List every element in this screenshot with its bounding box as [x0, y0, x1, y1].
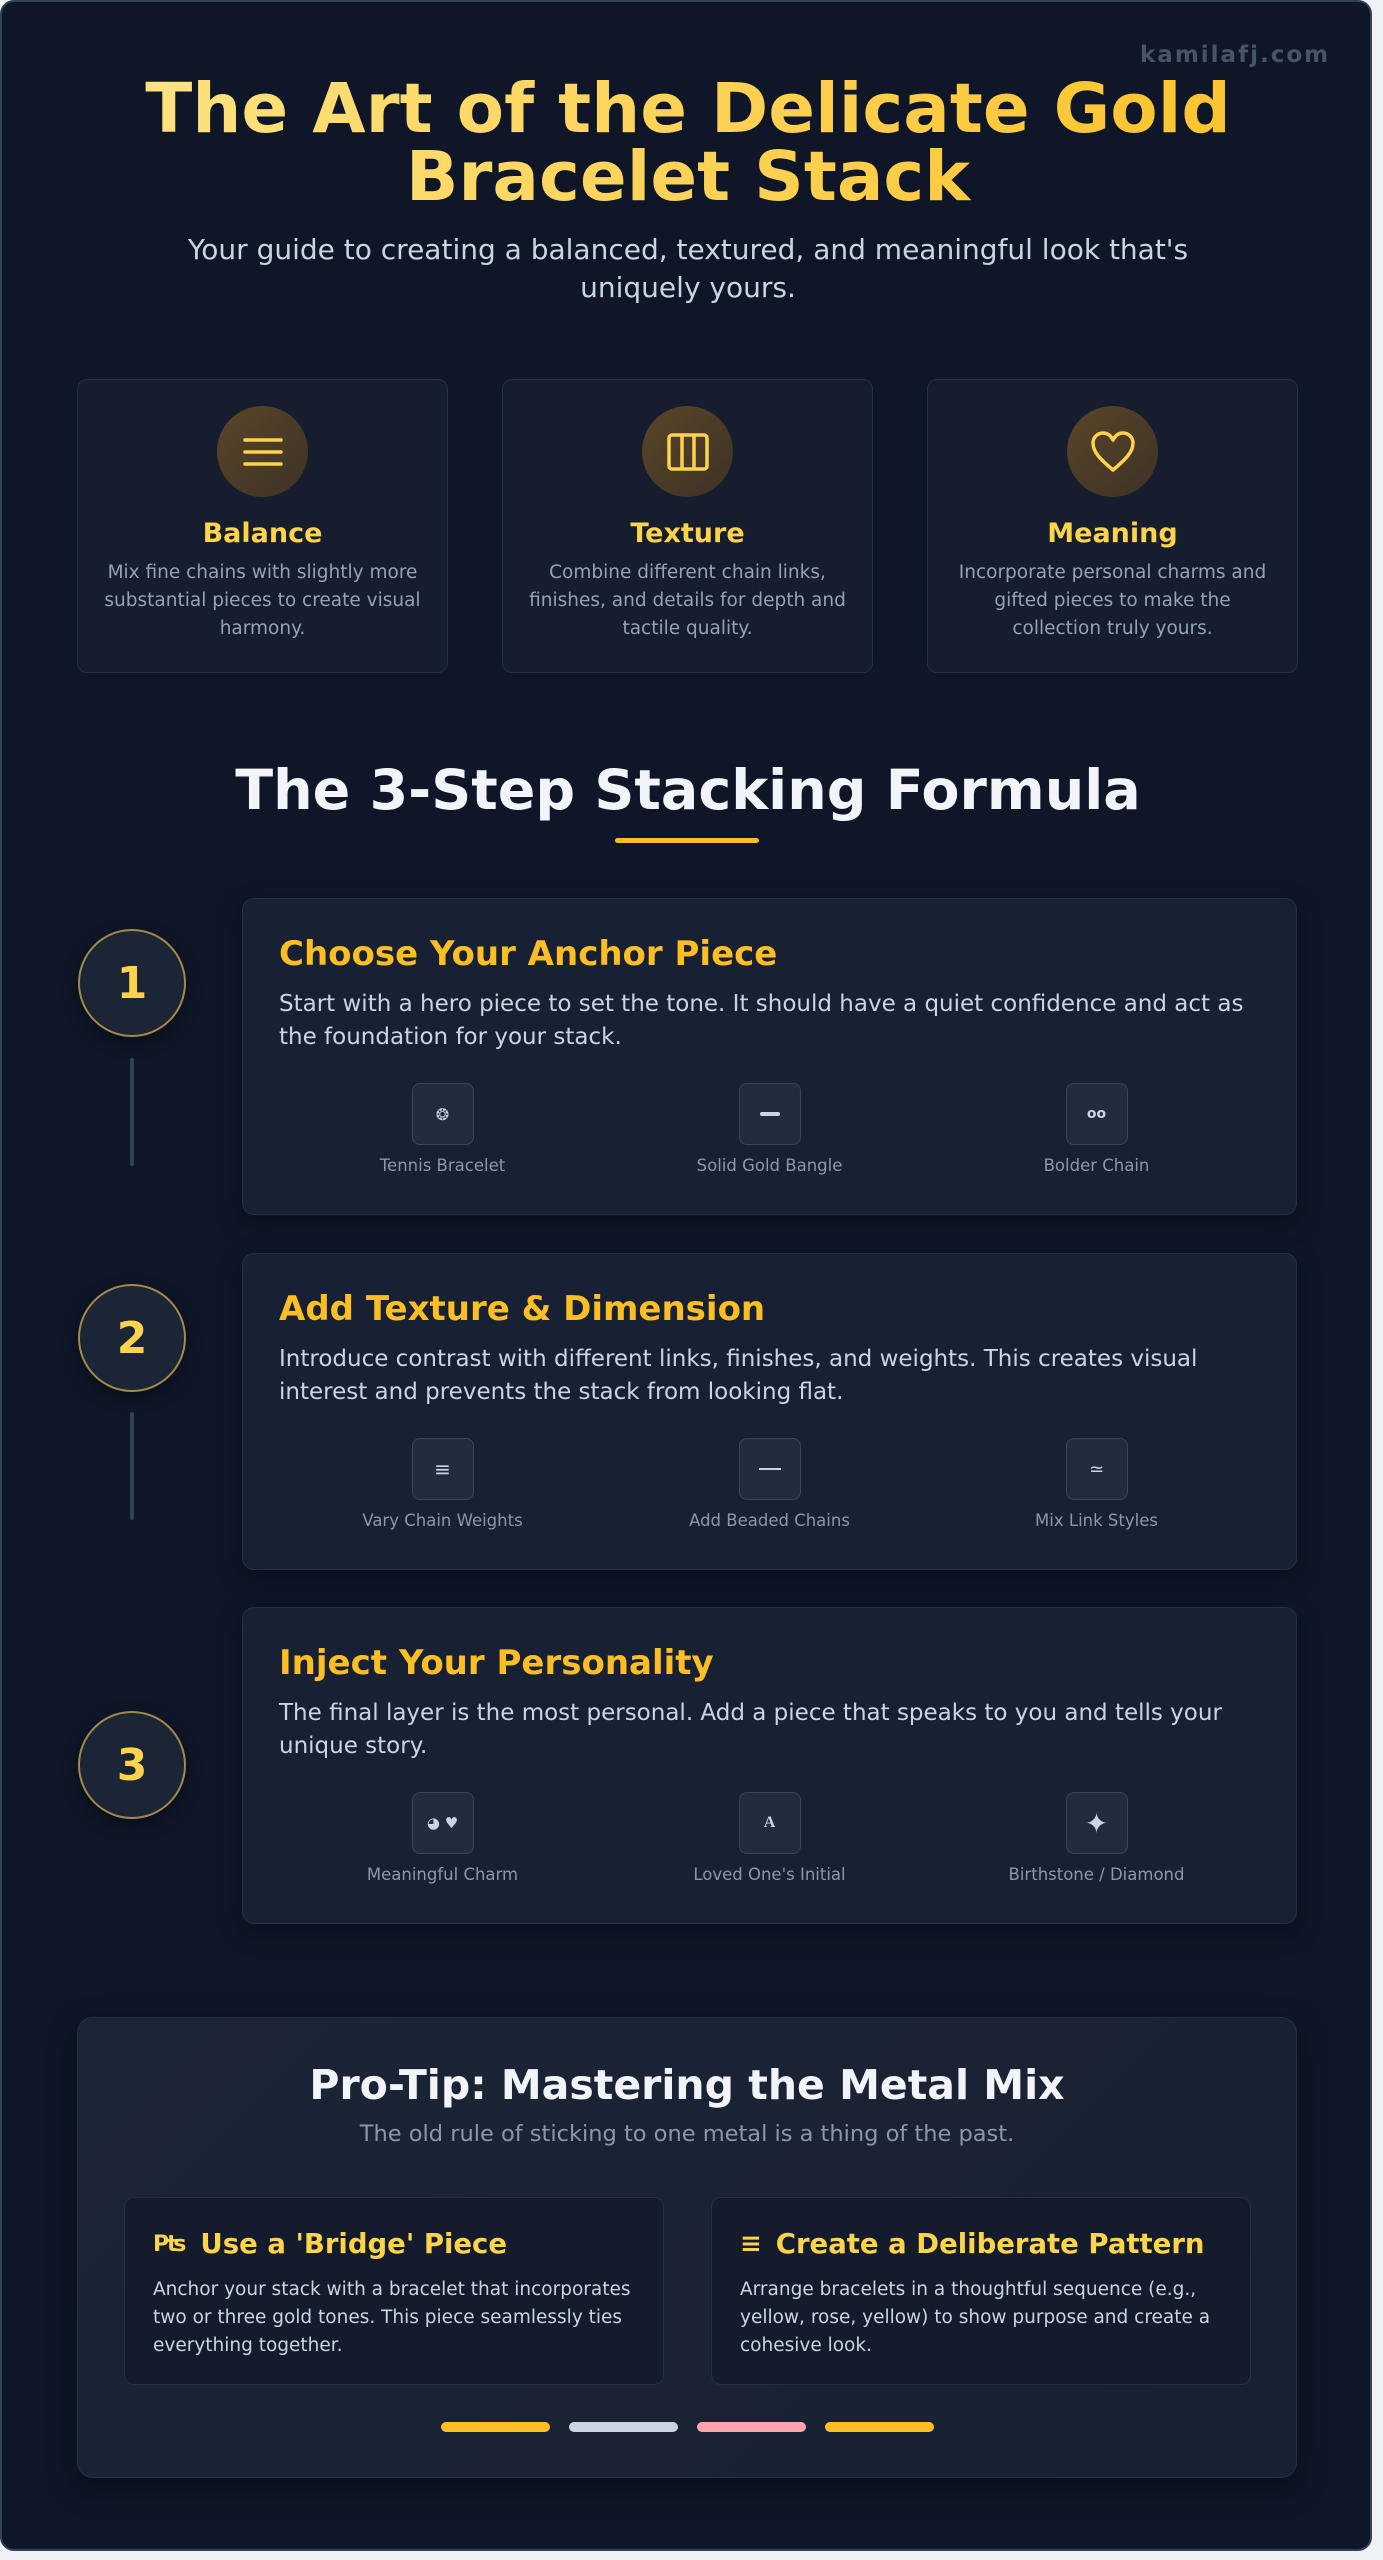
step 2 items: Mix Link Styles: [1035, 1511, 1158, 1530]
step 1 card: Choose Your Anchor Piece: [279, 934, 777, 974]
card: balance: Mix fine chains with slightly more substantial pieces to create visual harmony.: [104, 562, 421, 639]
step number 1: 1: [117, 958, 147, 1008]
step number 1: [78, 929, 186, 1037]
step 2 items: ≡: [434, 1457, 451, 1481]
subtitle: [188, 233, 1188, 304]
step 1 items: Bolder Chain: [1044, 1156, 1149, 1175]
step 3 items: ◕ ♥: [427, 1814, 458, 1832]
step 2 items: ≃: [1089, 1458, 1104, 1480]
step 3 items: Birthstone / Diamond: [1009, 1865, 1184, 1884]
step 3 card: The final layer is the most personal. Add a piece that speaks to you and tells your unique story.: [279, 1700, 1222, 1759]
tip: bridge piece: ₧: [153, 2232, 186, 2256]
title: Bracelet Stack: [406, 137, 970, 217]
card: texture: Combine different chain links, finishes, and details for depth and tactile quality.: [529, 562, 846, 639]
panel: pro tip: [77, 2017, 1297, 2478]
tip: pattern: Create a Deliberate Pattern: [776, 2228, 1204, 2260]
step 3 items: Meaningful Charm: [367, 1865, 518, 1884]
step 1 items: oo: [1087, 1106, 1106, 1122]
watermark: kamilafj.com: [1140, 42, 1330, 68]
step 3 items: Loved One's Initial: [693, 1865, 846, 1884]
step 1 items: Solid Gold Bangle: [697, 1156, 842, 1175]
card: texture: [502, 379, 873, 673]
subtitle: Your guide to creating a balanced, textured, and meaningful look that's: [188, 233, 1188, 266]
card: balance: [77, 379, 448, 673]
card: meaning: Incorporate personal charms and gifted pieces to make the collection truly yours.: [959, 562, 1266, 639]
subtitle: uniquely yours.: [580, 271, 796, 304]
icon: columns: [642, 406, 733, 497]
step 2 card: Add Texture & Dimension: [279, 1289, 765, 1329]
card: texture: Texture: [630, 518, 745, 549]
step 3 card: Inject Your Personality: [279, 1643, 714, 1683]
step 2 items: Add Beaded Chains: [689, 1511, 850, 1530]
tip: pattern: [711, 2197, 1251, 2385]
icon: heart: [1067, 406, 1158, 497]
step 1 card: Start with a hero piece to set the tone. It should have a quiet confidence and act as the foundation for your stack.: [279, 991, 1243, 1050]
card: meaning: Meaning: [1047, 518, 1178, 549]
step 2 items: Vary Chain Weights: [362, 1511, 523, 1530]
pro tip subtitle: The old rule of sticking to one metal is a thing of the past.: [360, 2121, 1014, 2147]
card: meaning: [927, 379, 1298, 673]
underline: [615, 838, 759, 843]
step 3 items: [367, 1792, 1184, 1884]
step 1 card: [242, 898, 1297, 1215]
step 3 items: A: [764, 1814, 775, 1831]
tip: pattern: ≡: [740, 2229, 762, 2259]
title: [2, 75, 1374, 211]
color bars: [441, 2422, 550, 2432]
tip: bridge piece: Use a 'Bridge' Piece: [200, 2228, 507, 2260]
step 1 items: [380, 1083, 1149, 1175]
step 3 card: [242, 1607, 1297, 1924]
step 1 items: ❂: [436, 1104, 449, 1124]
step 2 card: [242, 1253, 1297, 1570]
step number 3: [78, 1711, 186, 1819]
tip: bridge piece: Anchor your stack with a bracelet that incorporates two or three gold tones. This piece seamlessly ties everything together.: [153, 2279, 630, 2356]
card: balance: Balance: [203, 518, 322, 549]
step number 3: 3: [117, 1740, 147, 1790]
tip: bridge piece: [124, 2197, 664, 2385]
step 2 card: Introduce contrast with different links, finishes, and weights. This creates visual interest and prevents the stack from looking flat.: [279, 1346, 1197, 1405]
step number 2: [78, 1284, 186, 1392]
title: The Art of the Delicate Gold: [145, 69, 1231, 149]
tip: pattern: Arrange bracelets in a thoughtful sequence (e.g., yellow, rose, yellow) to show purpose and create a cohesive look.: [740, 2279, 1210, 2356]
step 3 items: ✦: [1085, 1806, 1108, 1840]
step 1 items: Tennis Bracelet: [380, 1156, 505, 1175]
step 2 items: [362, 1438, 1158, 1530]
section heading: The 3-Step Stacking Formula: [235, 758, 1141, 823]
icon: lines: [217, 406, 308, 497]
step number 2: 2: [117, 1312, 147, 1364]
pro tip heading: Pro-Tip: Mastering the Metal Mix: [309, 2061, 1065, 2109]
